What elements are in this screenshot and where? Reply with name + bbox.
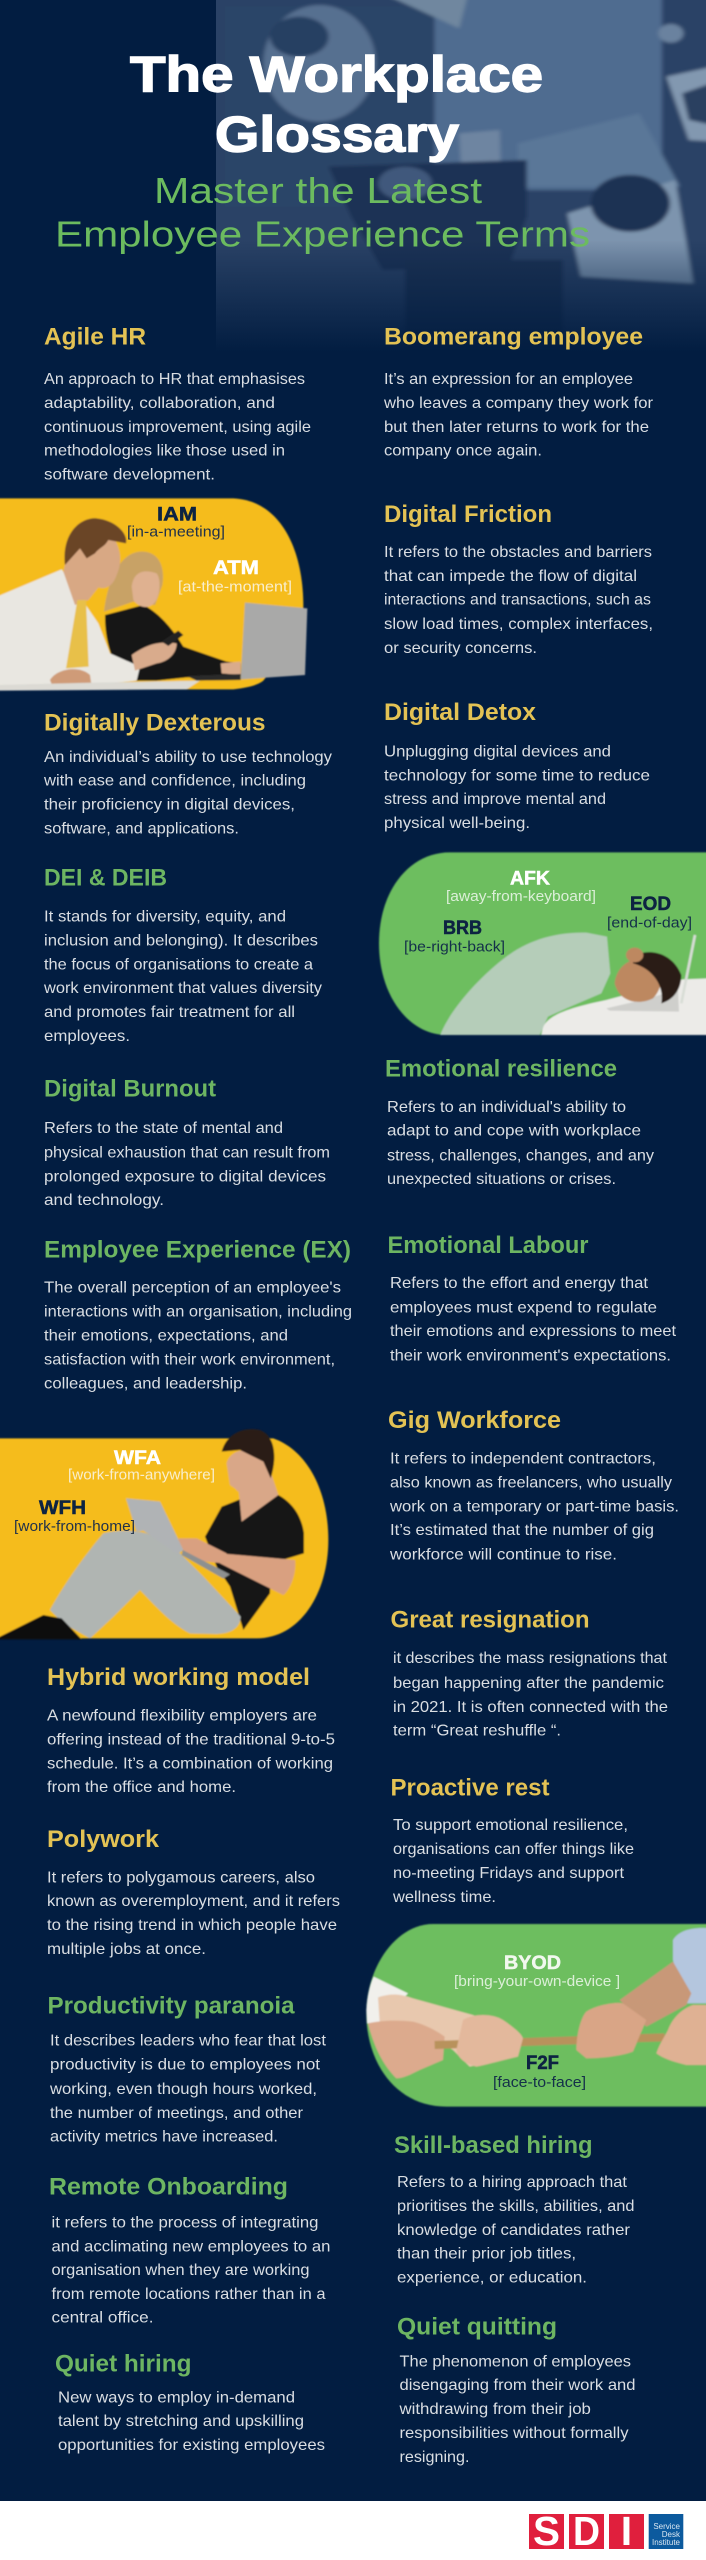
term: Productivity paranoia: Productivity paranoia [48,1992,295,2019]
label: BRB: [be-right-back] [404,939,505,956]
term: Hybrid working model: schedule. It’s a combination of working [47,1756,333,1773]
term: Digital Friction: that can impede the flow of digital [384,568,637,585]
subtitle: Master the Latest [154,170,482,211]
term: DEI & DEIB: and promotes fair treatment for all [44,1004,295,1021]
term: Employee Experience (EX): The overall perception of an employee's [44,1280,341,1296]
term: Employee Experience (EX): Employee Experience (EX) [44,1236,351,1264]
term: Emotional Labour: Emotional Labour [388,1232,588,1259]
term: Quiet hiring: opportunities for existing employees [58,2437,325,2454]
term: Emotional resilience [385,1055,654,1188]
term: Proactive rest: no-meeting Fridays and support [393,1865,625,1882]
label: IAM: IAM [157,505,197,526]
label: ATM [178,558,292,596]
term: Great resignation: it describes the mass resignations that [393,1650,668,1667]
subtitle: Employee Experience Terms [55,214,590,254]
term: Skill-based hiring: Skill-based hiring [394,2132,593,2159]
term: Quiet hiring [55,2350,325,2454]
term: Productivity paranoia: productivity is due to employees not [50,2056,321,2074]
term: Productivity paranoia: working, even though hours worked, [49,2081,317,2098]
term: Productivity paranoia [48,1992,327,2146]
term: Digitally Dexterous [43,709,332,838]
label: WFA: [work-from-anywhere] [68,1466,215,1483]
label: WFH: [work-from-home] [14,1518,135,1535]
term: Gig Workforce: It’s estimated that the number of gig [390,1522,654,1539]
label: BYOD: [bring-your-own-device ] [454,1973,620,1990]
term: Gig Workforce [388,1407,679,1563]
term: Digital Burnout [44,1075,330,1209]
term: Emotional Labour [388,1232,677,1365]
subtitle [55,170,590,254]
term: Great resignation [390,1606,668,1740]
panel: BYOD and F2F with hands pulling a rope [366,1924,706,2107]
term: Quiet quitting: disengaging from their work and [400,2377,636,2394]
term: Quiet quitting: responsibilities without formally [400,2425,628,2442]
term: Digital Detox: Unplugging digital devices and [384,743,611,760]
term: DEI & DEIB: inclusion and belonging). It describes [44,932,318,949]
term: Boomerang employee: Boomerang employee [384,324,643,351]
label: AFK [446,869,596,905]
header photo: team around a table [198,0,706,360]
label: F2F: F2F [526,2053,559,2074]
term: Proactive rest: Proactive rest [390,1775,550,1802]
term: Employee Experience (EX): their emotions, expectations, and [44,1327,288,1344]
title [130,46,543,162]
term: Agile HR: software development. [44,467,215,484]
logo: SDI Service Desk Institute: Desk [662,2530,681,2539]
label: IAM: [in-a-meeting] [127,524,225,541]
label: WFH [14,1498,135,1535]
term: Agile HR: methodologies like those used in [44,443,285,460]
term: Agile HR: An approach to HR that emphasises [44,371,305,388]
term: Agile HR: Agile HR [44,324,146,351]
label: WFA: WFA [114,1448,161,1469]
term: Hybrid working model: from the office and home. [47,1779,236,1796]
term: Remote Onboarding: Remote Onboarding [49,2174,288,2201]
term: Digital Burnout: Digital Burnout [44,1075,216,1102]
term: Digitally Dexterous: their proficiency in digital devices, [44,797,295,814]
label: IAM [127,505,225,541]
term: Proactive rest: organisations can offer things like [393,1841,634,1858]
term: Boomerang employee: who leaves a company they work for [383,395,654,412]
term: Skill-based hiring: than their prior job titles, [397,2246,576,2263]
logo: SDI Service Desk Institute [529,2508,683,2554]
term: Polywork [47,1826,340,1958]
term: Emotional Labour: their work environment's expectations. [390,1348,671,1365]
footer band [0,2501,706,2560]
term: Agile HR: adaptability, collaboration, and [44,395,275,412]
term: Skill-based hiring: experience, or education. [397,2269,587,2286]
term: Remote Onboarding [49,2174,330,2327]
term: Quiet hiring: talent by stretching and upskilling [58,2413,304,2430]
term: Quiet hiring: Quiet hiring [55,2350,192,2377]
term: Digitally Dexterous: Digitally Dexterous [44,709,266,736]
term: Gig Workforce: work on a temporary or part-time basis. [389,1498,679,1515]
term: Employee Experience (EX): satisfaction with their work environment, [44,1351,335,1368]
term: Digital Detox: physical well-being. [384,815,530,832]
term: Emotional resilience: stress, challenges, changes, and any [387,1147,654,1164]
term: Remote Onboarding: and acclimating new employees to an [52,2238,330,2256]
term: Digitally Dexterous: An individual’s ability to use technology [44,749,332,766]
label: F2F: [face-to-face] [493,2074,586,2091]
term: Digital Burnout: prolonged exposure to digital devices [44,1168,326,1185]
term: Agile HR: continuous improvement, using agile [44,419,311,436]
term: DEI & DEIB [43,865,322,1045]
logo: SDI Service Desk Institute: I [621,2508,632,2554]
term: Digital Friction: or security concerns. [384,640,537,657]
logo: SDI Service Desk Institute: Service [653,2522,681,2531]
term: Digital Friction: interactions and transactions, such as [384,592,651,609]
term: Emotional resilience: Refers to an individual's ability to [387,1099,626,1116]
term: Quiet quitting: Quiet quitting [397,2313,557,2340]
term: Skill-based hiring [394,2132,634,2286]
term: Agile HR [44,324,311,484]
title: Glossary [215,106,459,162]
term: Remote Onboarding: central office. [52,2310,154,2327]
term: Hybrid working model: offering instead of the traditional 9-to-5 [47,1732,335,1749]
term: DEI & DEIB: the focus of organisations to create a [44,956,313,973]
label: BRB: BRB [443,918,482,939]
term: Quiet quitting: withdrawing from their job [398,2401,591,2418]
term: Remote Onboarding: organisation when they are working [52,2262,310,2279]
term: Gig Workforce: also known as freelancers, who usually [390,1474,672,1492]
term: Quiet quitting: The phenomenon of employees [400,2354,631,2371]
term: Skill-based hiring: Refers to a hiring approach that [397,2174,628,2191]
term: Digital Friction: Digital Friction [384,501,552,528]
term: Productivity paranoia: It describes leaders who fear that lost [50,2032,327,2050]
term: Emotional resilience: adapt to and cope with workplace [387,1123,641,1140]
panel: IAM and ATM with two colleagues at a laptop [0,498,307,691]
term: Remote Onboarding: it refers to the process of integrating [52,2214,318,2232]
term: Emotional resilience: unexpected situations or crises. [387,1171,616,1188]
term: Emotional resilience: Emotional resilience [385,1055,617,1082]
term: Digital Detox [384,699,650,832]
term: Digital Friction: It refers to the obstacles and barriers [384,544,652,561]
term: Digital Burnout: Refers to the state of mental and [44,1120,283,1137]
term: Digitally Dexterous: software, and applications. [44,821,239,838]
label: BRB [404,918,505,956]
term: Boomerang employee [383,324,654,460]
term: Polywork: Polywork [47,1826,160,1853]
term: Gig Workforce: It refers to independent contractors, [390,1451,656,1468]
term: Proactive rest [390,1775,634,1906]
term: Quiet quitting: resigning. [400,2449,470,2466]
label: AFK: AFK [510,869,550,890]
label: AFK: [away-from-keyboard] [446,888,596,905]
label: BYOD: BYOD [504,1953,561,1974]
term: Remote Onboarding: from remote locations rather than in a [52,2286,326,2303]
term: DEI & DEIB: DEI & DEIB [44,865,167,892]
logo: SDI Service Desk Institute: S [533,2508,560,2554]
term: Quiet hiring: New ways to employ in-demand [58,2390,295,2406]
term: Gig Workforce: workforce will continue to rise. [389,1546,617,1563]
term: Digital Friction [384,501,653,657]
term: Emotional Labour: their emotions and expressions to meet [390,1323,677,1340]
term: Emotional Labour: Refers to the effort and energy that [390,1275,649,1292]
term: Gig Workforce: Gig Workforce [388,1407,561,1434]
term: Digitally Dexterous: with ease and confidence, including [43,773,306,790]
term: Emotional Labour: employees must expend to regulate [390,1300,657,1316]
label: WFA [68,1448,215,1483]
term: Boomerang employee: but then later returns to work for the [384,419,649,436]
title: The Workplace [130,46,543,102]
term: Polywork: It refers to polygamous careers, also [47,1870,315,1886]
term: Boomerang employee: It’s an expression for an employee [384,371,633,388]
label: WFH: WFH [39,1498,86,1519]
term: Digital Detox: stress and improve mental and [384,791,606,808]
term: Employee Experience (EX): colleagues, and leadership. [44,1376,247,1393]
panel: WFA and WFH with young man on laptop [0,1429,328,1639]
term: Hybrid working model: Hybrid working model [47,1664,310,1691]
term: Employee Experience (EX): interactions with an organisation, including [44,1303,352,1320]
term: Great resignation: began happening after the pandemic [393,1675,664,1692]
term: Boomerang employee: company once again. [384,443,542,460]
panel: AFK, EOD and BRB with tired woman on laptop [379,852,706,1035]
label: EOD [607,894,692,932]
term: Employee Experience (EX) [44,1236,352,1393]
term: DEI & DEIB: It stands for diversity, equity, and [44,908,286,925]
label: EOD: [end-of-day] [607,915,692,932]
term: Proactive rest: To support emotional resilience, [393,1817,628,1834]
term: DEI & DEIB: employees. [44,1028,130,1045]
term: Great resignation: term “Great reshuffle “. [393,1723,561,1740]
label: F2F [493,2053,586,2091]
term: Polywork: multiple jobs at once. [47,1941,206,1958]
term: Skill-based hiring: prioritises the skills, abilities, and [397,2198,634,2215]
term: Great resignation: Great resignation [390,1606,590,1634]
term: Hybrid working model [47,1664,335,1796]
term: Hybrid working model: A newfound flexibility employers are [47,1708,317,1725]
label: ATM: ATM [213,558,259,579]
term: Digital Detox: Digital Detox [384,699,537,726]
label: EOD: EOD [630,894,671,915]
label: BYOD [454,1953,620,1990]
term: Polywork: to the rising trend in which people have [47,1917,337,1934]
term: Digital Detox: technology for some time to reduce [384,767,650,784]
term: Digital Friction: slow load times, complex interfaces, [384,616,653,633]
logo: SDI Service Desk Institute: D [573,2508,600,2554]
term: Productivity paranoia: the number of meetings, and other [50,2105,304,2122]
term: Digital Burnout: and technology. [44,1192,164,1209]
logo: SDI Service Desk Institute: Institute [652,2538,681,2547]
term: Polywork: known as overemployment, and it refers [47,1893,340,1910]
term: Quiet quitting [397,2313,636,2466]
term: Proactive rest: wellness time. [392,1889,496,1906]
label: ATM: [at-the-moment] [178,579,292,596]
term: Digital Burnout: physical exhaustion that can result from [44,1144,330,1162]
term: DEI & DEIB: work environment that values diversity [43,980,322,997]
term: Productivity paranoia: activity metrics have increased. [50,2129,278,2146]
term: Skill-based hiring: knowledge of candidates rather [397,2222,631,2239]
term: Great resignation: in 2021. It is often connected with the [393,1699,668,1716]
